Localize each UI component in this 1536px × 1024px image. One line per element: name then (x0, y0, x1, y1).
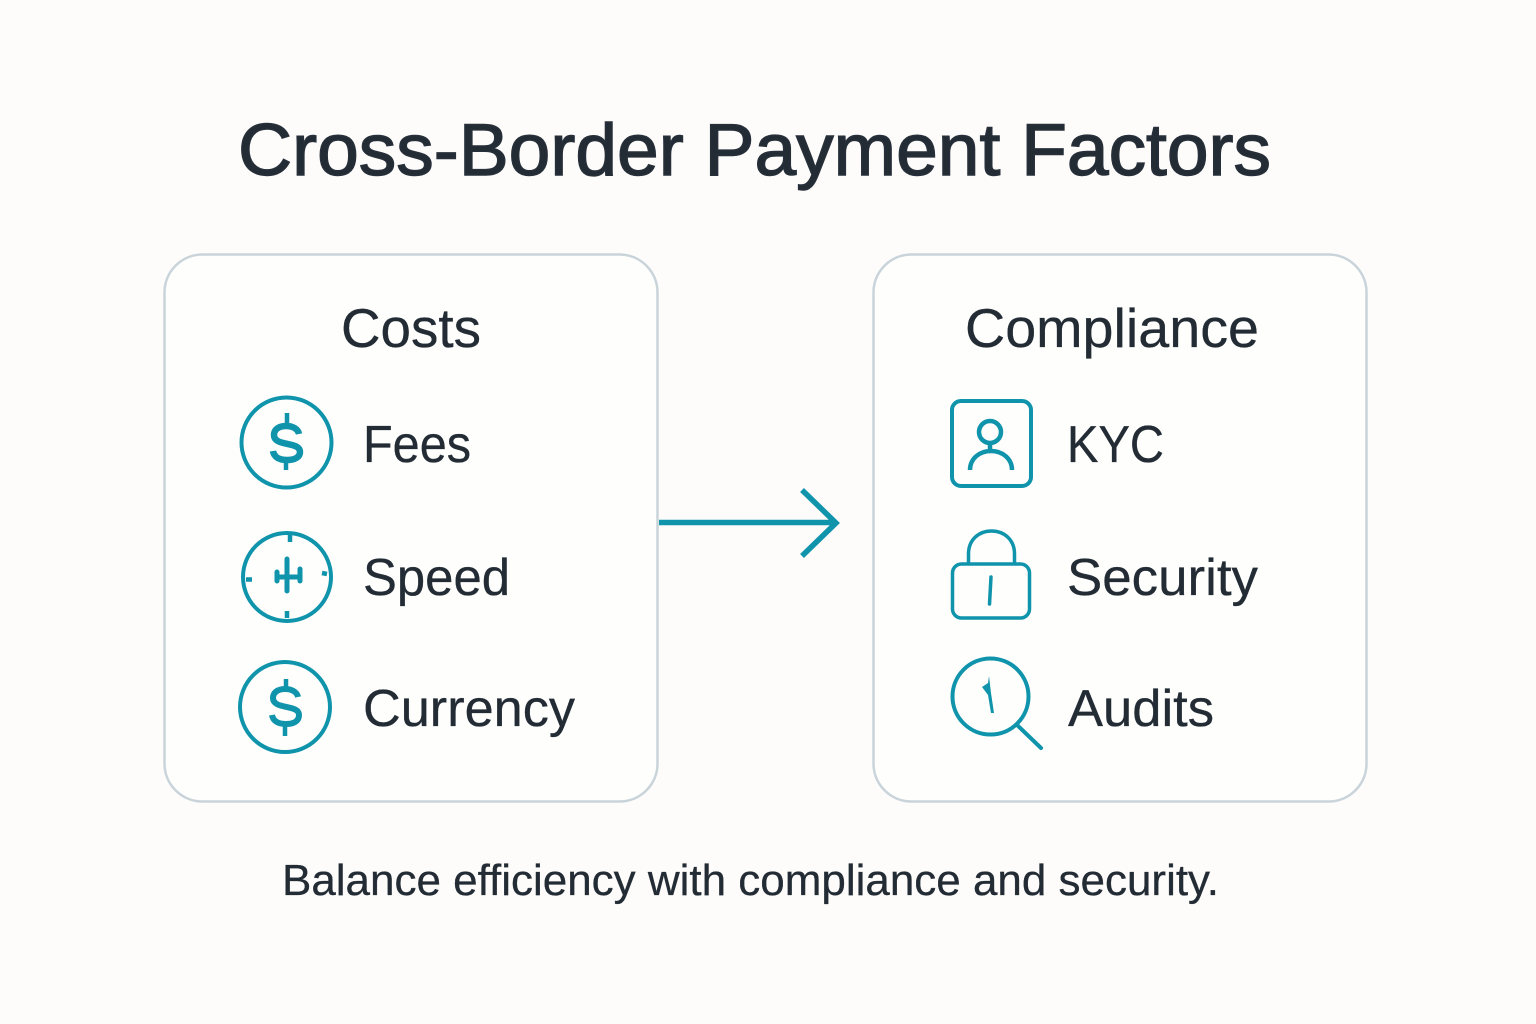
label: currency: Currency (363, 680, 575, 738)
icon: kyc person (952, 401, 1031, 486)
label: kyc: KYC (1067, 416, 1164, 474)
caption: Balance efficiency with compliance and security. (282, 856, 1219, 905)
heading: compliance: Compliance (965, 297, 1259, 359)
icon: audits magnifier (952, 658, 1041, 748)
label: speed: Speed (363, 549, 510, 607)
label: audits: Audits (1068, 680, 1214, 738)
icon: security lock (952, 531, 1030, 618)
icon: speed dial (243, 533, 331, 621)
icon: currency dollar (240, 662, 330, 752)
panel: costs (164, 254, 658, 802)
heading: costs: Costs (341, 297, 481, 359)
arrow (659, 490, 836, 556)
label: security: Security (1067, 549, 1258, 607)
icon: fees dollar (242, 398, 332, 488)
title: Cross-Border Payment Factors (238, 110, 1271, 191)
panel: compliance (874, 254, 1366, 802)
label: fees: Fees (363, 416, 471, 474)
